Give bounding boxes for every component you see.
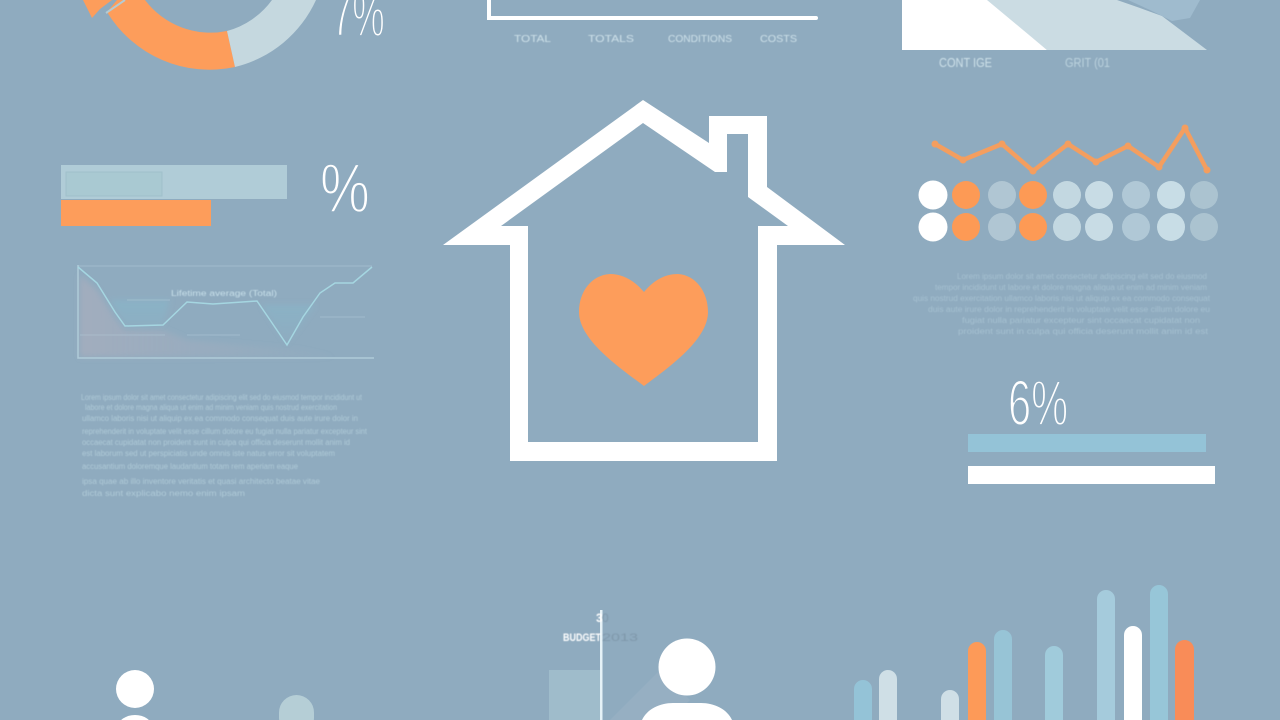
area labels [939, 55, 1110, 70]
chart axis [489, 0, 816, 18]
axis labels [514, 34, 797, 45]
axis labels: CONDITIONS [668, 34, 732, 45]
bar: blue [968, 434, 1206, 452]
diagonal band [610, 670, 690, 720]
paragraph left: accusantium doloremque laudantium totam rem aperiam eaque [82, 462, 299, 471]
paragraph right: Lorem ipsum dolor sit amet consectetur adipiscing elit sed do eiusmod [957, 272, 1207, 281]
person: large [642, 638, 732, 720]
paragraph left: dicta sunt explicabo nemo enim ipsam [82, 489, 245, 498]
top center chart frame with labels [489, 0, 816, 45]
paragraph left [81, 393, 368, 498]
paragraph left: ipsa quae ab illo inventore veritatis et quasi architecto beatae vitae [82, 477, 321, 486]
progress bars left [61, 165, 287, 226]
figure labels: 3 [596, 611, 603, 625]
paragraph right: tempor incididunt ut labore et dolore magna aliqua ut enim ad minim veniam [935, 283, 1207, 292]
paragraph right: fugiat nulla pariatur excepteur sint occaecat cupidatat non [962, 316, 1200, 325]
house icon [443, 100, 845, 461]
figure labels: BUDGET [563, 632, 601, 644]
donut chart [83, 0, 316, 70]
area labels: CONT IGE [939, 55, 992, 70]
line and dots right [918, 124, 1218, 242]
grid lines [78, 266, 372, 335]
dot grid [918, 180, 1218, 242]
paragraph right: proident sunt in culpa qui officia deserunt mollit anim id est [958, 327, 1209, 336]
progress bars right [968, 434, 1215, 484]
paragraph left: Lorem ipsum dolor sit amet consectetur adipiscing elit sed do eiusmod tempor incididunt ut [81, 393, 363, 402]
paragraph left: labore et dolore magna aliqua ut enim ad minim veniam quis nostrud exercitation [85, 403, 337, 412]
people icons left [116, 670, 314, 720]
light panel [549, 670, 601, 720]
bar: orange [61, 200, 211, 226]
chart axes [78, 265, 374, 358]
figure labels: 0 [602, 611, 609, 625]
donut fragment: orange wedge [83, 0, 112, 18]
bar: white [968, 466, 1215, 484]
chart fill: teal [110, 300, 315, 345]
area labels: GRIT (01 [1065, 55, 1110, 70]
paragraph right: quis nostrud exercitation ullamco laboris nisi ut aliquip ex ea commodo consequat [913, 294, 1211, 303]
chart title: Lifetime average (Total) [171, 289, 277, 298]
figure labels: 2013 [602, 632, 638, 644]
paragraph right [913, 272, 1211, 336]
donut segment: light [227, 0, 316, 67]
bar chart bottom right [854, 585, 1194, 720]
vertical line [600, 610, 602, 720]
axis labels: TOTAL [514, 34, 552, 45]
percent label: left bars: % [320, 150, 370, 227]
paragraph left: est laborum sed ut perspiciatis unde omnis iste natus error sit voluptatem [82, 449, 335, 458]
percent label: 6%: 6% [1008, 368, 1068, 439]
axis labels: COSTS [760, 34, 797, 45]
bar: light [61, 165, 287, 199]
area: white [902, 0, 1047, 50]
person: light [279, 695, 314, 720]
icon: heart [579, 274, 708, 386]
bar: inner [66, 172, 162, 196]
house outline [443, 100, 845, 461]
bottom center figure [549, 610, 732, 720]
paragraph left: ullamco laboris nisi ut aliquip ex ea commodo consequat duis aute irure dolor in [82, 414, 358, 423]
chart line [78, 267, 372, 345]
figure labels [563, 611, 638, 644]
area: light [985, 0, 1207, 50]
chart fill: pink [80, 275, 335, 357]
area: blue [1128, 0, 1200, 21]
orange line [932, 124, 1210, 174]
paragraph right: duis aute irure dolor in reprehenderit in voluptate velit esse cillum dolore eu [928, 305, 1210, 314]
paragraph left: occaecat cupidatat non proident sunt in culpa qui officia deserunt mollit anim id [82, 438, 350, 447]
person: white [116, 670, 154, 720]
paragraph left: reprehenderit in voluptate velit esse cillum dolore eu fugiat nulla pariatur excepteur sint [82, 427, 368, 436]
donut fragment: light sliver [106, 0, 125, 13]
donut segment: orange [107, 0, 235, 70]
axis labels: TOTALS [588, 34, 634, 45]
top right area chart [902, 0, 1207, 70]
line chart left [78, 265, 374, 358]
